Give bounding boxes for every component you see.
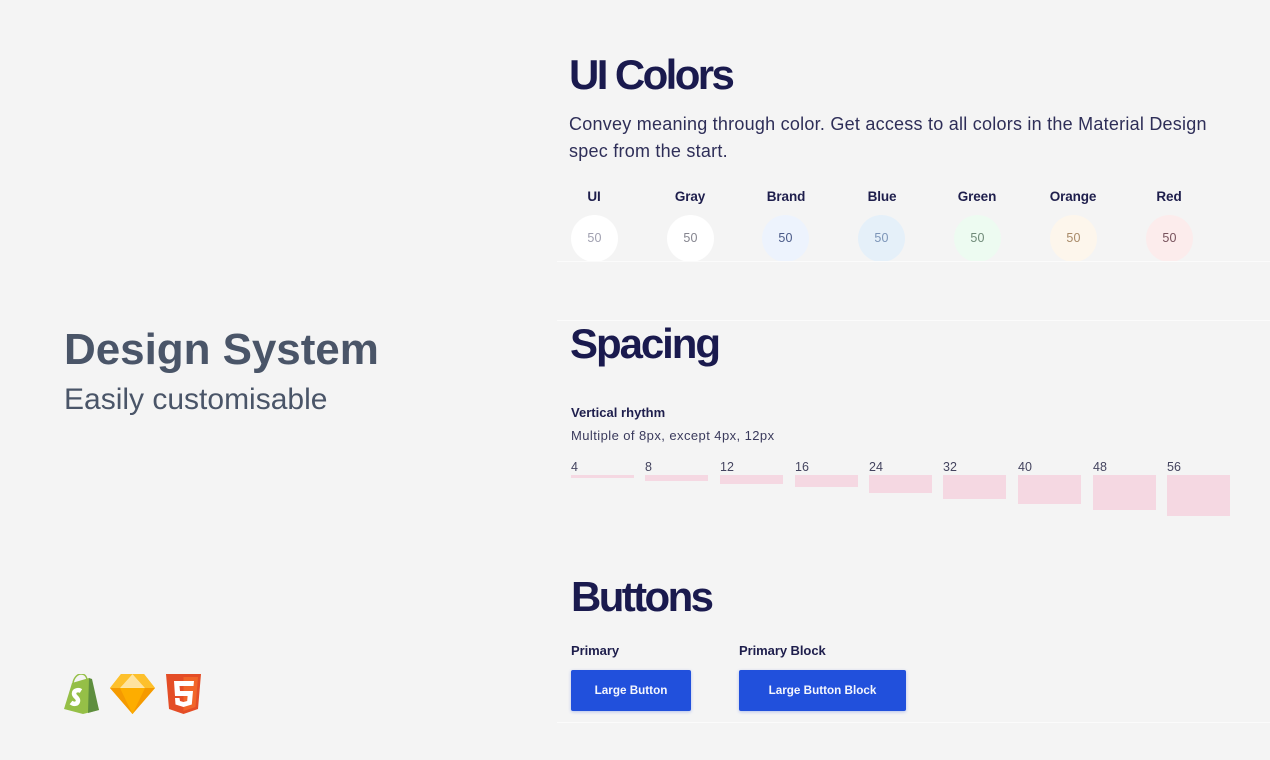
swatch: Red 50: 50 [1162,231,1177,245]
button: Large Button Block: Large Button Block [769,684,876,697]
spacing scale: 16 [795,460,809,474]
spacing scale: 32 [943,460,957,474]
title: Design System: Design System [64,325,379,374]
swatch: Blue 50: 50 [874,231,889,245]
swatch: Blue 50 [858,215,905,262]
heading: Spacing: Spacing [570,320,719,367]
swatch: Red 50 [1146,215,1193,262]
button: Large Button Block [739,670,906,711]
label: Gray: Gray [675,188,705,204]
label: Green: Green [958,188,996,204]
swatch: Green 50 [954,215,1001,262]
label: Red: Red [1156,188,1182,204]
spacing scale: 48 [1093,460,1107,474]
button: Large Button: Large Button [595,684,667,697]
label: Brand: Brand [767,188,805,204]
description: multiple of 8px: Multiple of 8px, except 4px, 12px [571,428,775,443]
icon: Sketch diamond [110,674,155,714]
panel: UI Colors [569,51,1207,161]
label: Primary: Primary [571,643,619,658]
icon: Shopify bag [64,674,99,714]
swatch: UI 50: 50 [587,231,602,245]
label: Primary Block: Primary Block [739,643,826,658]
spacing scale: 12 [720,460,734,474]
spacing scale [571,460,1230,516]
spacing scale: 24 [869,460,883,474]
label: UI: UI [587,188,601,204]
swatch: Gray 50 [667,215,714,262]
label: Orange: Orange [1050,188,1096,204]
description: spec from the start. [569,141,728,161]
spacing scale: 40 [1018,460,1032,474]
button: Large Button [571,670,691,711]
spacing scale: 8 [645,460,652,474]
spacing scale: 56 [1167,460,1181,474]
swatch: Brand 50: 50 [778,231,793,245]
subtitle: Easily customisable [64,383,327,416]
label: Vertical rhythm: Vertical rhythm [571,405,665,420]
swatch: Brand 50 [762,215,809,262]
heading: Buttons: Buttons [571,573,711,620]
spacing scale: 4 [571,460,578,474]
heading: UI Colors: UI Colors [569,51,732,98]
swatch: UI 50 [571,215,618,262]
description: Convey meaning through color. Get access to all colors in the Material Design [569,114,1207,134]
swatch: Orange 50 [1050,215,1097,262]
swatch: Green 50: 50 [970,231,985,245]
swatch: Orange 50: 50 [1066,231,1081,245]
label: Blue: Blue [868,188,896,204]
icon: HTML5 shield [166,674,201,714]
swatch: Gray 50: 50 [683,231,698,245]
description [569,114,1207,161]
